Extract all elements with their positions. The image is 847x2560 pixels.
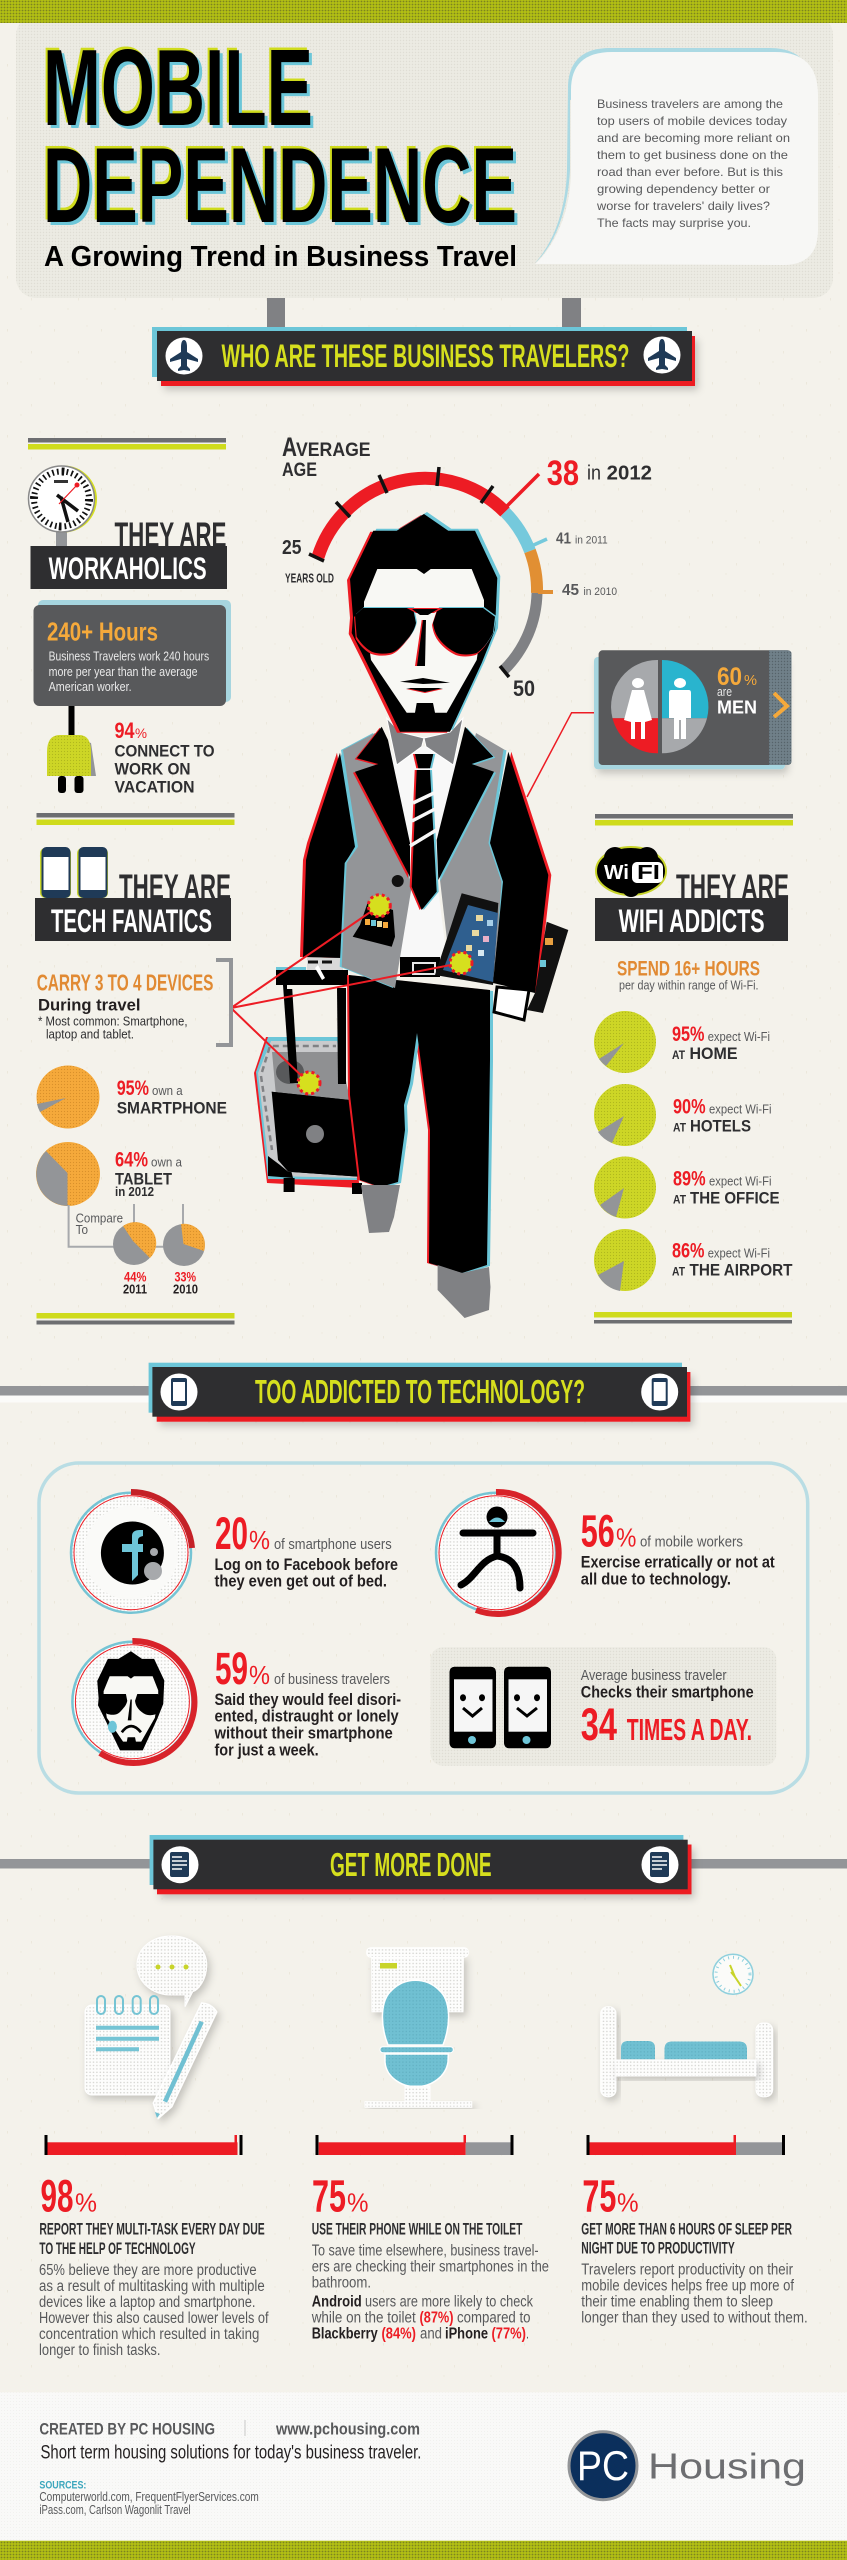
stat: facebook 20 percent: %	[249, 1525, 270, 1555]
heading: workaholics: WORKAHOLICS	[49, 550, 207, 586]
stat: wifi at the office: THE OFFICE	[690, 1188, 780, 1207]
sources: Computerworld.com, FrequentFlyerServices.com	[39, 2490, 259, 2504]
stat: smartphone: own a	[152, 1083, 183, 1098]
heading: average age	[282, 432, 371, 481]
callout: gender split	[527, 650, 792, 797]
stat: wifi at home	[594, 1011, 770, 1073]
section banner: who are these business travelers	[152, 298, 695, 386]
icon: wifi badge	[596, 847, 666, 897]
bar chart: 98 percent	[44, 2135, 242, 2155]
column: multi-task 98 percent: devices like a laptop and smartphone.	[39, 2294, 256, 2311]
stat: 94 percent	[114, 718, 214, 796]
intro speech bubble: The facts may surprise you.	[597, 216, 751, 230]
section banner: too addicted to technology	[0, 1363, 847, 1422]
heading: tech fanatics: TECH FANATICS	[51, 903, 212, 939]
section banner: get more done	[0, 1835, 847, 1894]
stat: disoriented 59 percent: for just a week.	[214, 1741, 319, 1760]
panel: addiction stats	[39, 1463, 808, 1793]
callout: 240+ hours: more per year than the average	[49, 664, 198, 679]
column: multi-task 98 percent: However this also caused lower levels of	[39, 2310, 269, 2327]
stat: facebook 20 percent: Log on to Facebook before	[214, 1555, 398, 1574]
compare connector: Compare	[76, 1211, 123, 1226]
chart: average age gauge: 2012	[607, 462, 652, 484]
chart: average age gauge: in	[587, 462, 601, 484]
column: sleep 75 percent: 75	[582, 2171, 616, 2222]
intro speech bubble	[535, 48, 818, 265]
pie: 2010: 2010	[173, 1281, 198, 1296]
title: DEPENDENCE	[41, 122, 520, 248]
illustration: suitcase	[254, 967, 362, 1194]
stat: wifi at the airport: 86%	[672, 1240, 705, 1263]
column: sleep 75 percent	[581, 2135, 808, 2326]
column: sleep 75 percent: NIGHT DUE TO PRODUCTIVITY	[581, 2238, 735, 2257]
callout: checks smartphone 34 times: Average business traveler	[581, 1667, 727, 1684]
callout: gender split: are	[717, 684, 732, 699]
intro speech bubble: growing dependency better or	[597, 182, 770, 196]
icon: bed and wall clock	[601, 1954, 773, 2097]
stat: wifi at the airport: THE AIRPORT	[690, 1261, 793, 1280]
callout: gender split: MEN	[717, 697, 757, 717]
heading: wifi addicts: WIFI ADDICTS	[619, 903, 765, 939]
title: MOBILE: MOBILE	[46, 30, 316, 152]
intro speech bubble: top users of mobile devices today	[597, 114, 787, 128]
heading: average age: A	[282, 432, 297, 462]
icon: document left	[162, 1846, 198, 1883]
panel: wifi addicts	[594, 814, 793, 1324]
heading: workaholics	[30, 546, 227, 589]
compare connector: To	[76, 1222, 88, 1237]
pie: 2011	[113, 1222, 156, 1296]
chart: average age gauge: 25	[282, 537, 302, 559]
stat: facebook 20 percent: of smartphone users	[274, 1536, 392, 1553]
compare connector	[69, 1204, 183, 1247]
column: toilet 75 percent: %	[347, 2188, 368, 2218]
callout: gender split: %	[744, 672, 757, 689]
stat: disoriented 59 percent: ented, distraught or lonely	[214, 1707, 399, 1726]
column: multi-task 98 percent: REPORT THEY MULTI-TASK EVERY DAY DUE	[39, 2219, 265, 2238]
icon: wifi badge: Wi	[604, 862, 629, 884]
stat: 94 percent: WORK ON	[114, 759, 190, 778]
stat: 94 percent: %	[135, 725, 147, 741]
stat: wifi at the office	[594, 1156, 780, 1218]
stat: wifi at hotels	[594, 1084, 772, 1146]
stat: wifi at the airport: AT	[672, 1265, 686, 1279]
callout: 240+ hours	[34, 600, 231, 706]
stat: exercise 56 percent: Exercise erratically or not at	[581, 1552, 775, 1571]
stat: disoriented 59 percent: 59	[215, 1643, 248, 1694]
chart: average age gauge: 45	[562, 582, 579, 599]
column: toilet 75 percent: (87%)	[420, 2310, 454, 2327]
title: MOBILE: MOBILE	[41, 24, 311, 146]
stat: wifi at the airport	[594, 1229, 793, 1291]
column: sleep 75 percent: longer than they used to without them.	[581, 2309, 808, 2326]
column: toilet 75 percent	[311, 2135, 549, 2343]
column: toilet 75 percent: while on the toilet	[311, 2310, 416, 2327]
icon: wifi badge: FI	[637, 862, 660, 884]
illustration: jacket and shirt	[300, 718, 551, 993]
text: spend hours: per day within range of Wi-Fi.	[619, 977, 758, 992]
intro speech bubble: road than ever before. But is this	[597, 165, 783, 179]
column: multi-task 98 percent: longer to finish tasks.	[39, 2342, 160, 2359]
stat: smartphone: SMARTPHONE	[117, 1098, 227, 1117]
stat: smartphone: 95%	[117, 1077, 149, 1100]
title: DEPENDENCE: DEPENDENCE	[46, 128, 520, 248]
pie: 2011: 44%	[124, 1269, 147, 1285]
callout: 240+ hours: American worker.	[49, 679, 132, 694]
top green band	[0, 0, 847, 23]
column: multi-task 98 percent: %	[75, 2188, 97, 2218]
intro speech bubble: worse for travelers' daily lives?	[596, 199, 770, 213]
icon: notepad, speech bubble and pencil	[85, 1936, 217, 2118]
stat: wifi at the airport: expect Wi-Fi	[708, 1246, 770, 1261]
text: spend hours	[617, 957, 760, 992]
heading: average age: AGE	[282, 460, 317, 481]
callout: checks smartphone 34 times: TIMES A DAY.	[627, 1712, 752, 1747]
panel: wifi addicts: THEY ARE	[676, 868, 789, 907]
column: toilet 75 percent: bathroom.	[312, 2275, 371, 2292]
column: toilet 75 percent: and	[420, 2326, 442, 2343]
pie: 2010: 33%	[174, 1269, 196, 1285]
stat: facebook 20 percent	[71, 1492, 398, 1613]
stat: wifi at hotels: expect Wi-Fi	[709, 1101, 772, 1116]
icon: document right	[642, 1846, 678, 1883]
stat: wifi at hotels: AT	[673, 1121, 687, 1135]
column: multi-task 98 percent: TO THE HELP OF TECHNOLOGY	[39, 2239, 196, 2258]
column: toilet 75 percent: (84%)	[382, 2326, 416, 2343]
heading: tech fanatics	[35, 898, 231, 941]
logo: PC Housing: PC	[577, 2442, 629, 2489]
icon: phone right	[641, 1374, 678, 1410]
column: sleep 75 percent: their time enabling them to sleep	[581, 2293, 773, 2310]
pie: tablet	[36, 1142, 100, 1206]
title: DEPENDENCE: DEPENDENCE	[43, 125, 517, 245]
chart: average age gauge: YEARS OLD	[285, 570, 334, 585]
column: toilet 75 percent: ers are checking their smartphones in the	[312, 2259, 549, 2276]
column: toilet 75 percent: compared to	[457, 2310, 530, 2327]
pie: 2011: 2011	[123, 1281, 147, 1296]
illustration: head with sunglasses	[347, 512, 500, 733]
column: toilet 75 percent: Blackberry	[312, 2326, 378, 2343]
heading: wifi addicts	[595, 898, 788, 941]
title: MOBILE	[41, 24, 316, 152]
chart: average age gauge	[282, 432, 652, 701]
text: carry devices: During travel	[38, 996, 140, 1015]
column: toilet 75 percent: 75	[312, 2171, 346, 2222]
illustration: shoes	[361, 1185, 490, 1318]
column: multi-task 98 percent: concentration which resulted in taking	[39, 2326, 259, 2343]
icon: facebook ring	[71, 1492, 192, 1613]
chart: average age gauge: 41	[556, 530, 571, 547]
stat: 94 percent: CONNECT TO	[114, 742, 214, 761]
column: multi-task 98 percent: 65% believe they are more productive	[39, 2262, 257, 2279]
text: carry devices	[37, 970, 213, 1042]
stat: wifi at home: HOME	[690, 1044, 738, 1063]
icon: crying face ring	[72, 1641, 194, 1763]
footer: Short term housing solutions for today's business traveler.	[40, 2442, 421, 2463]
stat: tablet: TABLET	[115, 1169, 173, 1188]
column: toilet 75 percent: USE THEIR PHONE WHILE ON THE TOILET	[312, 2219, 523, 2238]
pie: men vs women	[611, 660, 708, 753]
bar chart: 75 percent toilet	[316, 2135, 514, 2155]
stat: exercise 56 percent	[436, 1492, 775, 1614]
connector lines to devices	[231, 895, 472, 1094]
chart: average age gauge: in 2010	[584, 586, 617, 598]
intro speech bubble: them to get business done on the	[597, 148, 788, 162]
column: toilet 75 percent: Android	[312, 2294, 362, 2311]
icon: plane left	[166, 338, 202, 374]
stat: tablet: in 2012	[115, 1184, 154, 1199]
callout: gender split: 60	[717, 663, 742, 691]
icon: plane right	[644, 336, 680, 374]
column: toilet 75 percent: (77%)	[492, 2326, 526, 2343]
stat: disoriented 59 percent: without their smartphone	[214, 1724, 393, 1743]
header panel	[0, 0, 847, 298]
pie: smartphone	[36, 1066, 100, 1128]
illustration: tablets	[435, 893, 568, 1020]
stat: wifi at home: 95%	[672, 1023, 705, 1046]
footer	[0, 2392, 847, 2541]
stat: disoriented 59 percent: Said they would feel disori-	[214, 1690, 401, 1709]
stat: wifi at the office: expect Wi-Fi	[709, 1174, 772, 1189]
bar chart: 75 percent sleep	[586, 2135, 785, 2155]
column: multi-task 98 percent	[39, 2135, 269, 2359]
stat: tablet	[115, 1149, 183, 1199]
stat: wifi at home: expect Wi-Fi	[708, 1029, 770, 1044]
intro speech bubble: and are becoming more reliant on	[597, 131, 790, 145]
panel: tech fanatics	[35, 813, 234, 1324]
illustration: trousers	[347, 975, 493, 1274]
callout: checks smartphone 34 times	[431, 1647, 776, 1766]
logo: PC Housing: Housing	[648, 2445, 806, 2486]
icon: phone left	[160, 1374, 198, 1410]
icon: two phones	[40, 847, 108, 898]
stat: exercise 56 percent: %	[616, 1523, 636, 1553]
chart: average age gauge: in 2011	[575, 534, 608, 546]
pie: 2010	[163, 1224, 205, 1296]
sources: iPass.com, Carlson Wagonlit Travel	[39, 2503, 191, 2517]
column: toilet 75 percent: iPhone	[445, 2326, 488, 2343]
icon: power plug	[47, 706, 96, 793]
column: sleep 75 percent: %	[617, 2188, 639, 2218]
footer: www.pchousing.com	[275, 2419, 420, 2438]
stat: wifi at the office: 89%	[673, 1168, 706, 1191]
stat: exercise 56 percent: all due to technology.	[581, 1569, 731, 1588]
subtitle: A Growing Trend in Business Travel	[44, 241, 517, 273]
stat: 94 percent: VACATION	[114, 777, 194, 796]
panel: tech fanatics: THEY ARE	[119, 868, 231, 907]
stat: wifi at the office: AT	[673, 1192, 687, 1206]
chart: average age gauge: 50	[513, 676, 535, 701]
title: DEPENDENCE: DEPENDENCE	[41, 122, 515, 242]
logo: PC Housing	[569, 2432, 806, 2500]
stat: facebook 20 percent: they even get out of bed.	[214, 1572, 387, 1591]
sources	[39, 2479, 259, 2517]
section banner: get more done: GET MORE DONE	[330, 1846, 492, 1883]
icon: smiling phones	[450, 1667, 551, 1748]
stat: disoriented 59 percent: %	[249, 1660, 270, 1690]
stat: disoriented 59 percent: of business travelers	[274, 1671, 390, 1688]
column: toilet 75 percent: .	[526, 2326, 529, 2343]
chart: average age gauge: 38	[547, 454, 579, 493]
column: sleep 75 percent: mobile devices helps free up more of	[581, 2277, 795, 2294]
callout: checks smartphone 34 times: 34	[581, 1699, 617, 1750]
column: toilet 75 percent: users are more likely to check	[365, 2294, 533, 2311]
footer: CREATED BY PC HOUSING	[39, 2419, 215, 2438]
illustration: traveler character	[231, 512, 568, 1318]
stat: tablet: 64%	[115, 1149, 148, 1172]
panel: workaholics	[28, 438, 231, 796]
stat: exercise 56 percent: 56	[581, 1506, 615, 1557]
icon: exercise ring	[436, 1492, 559, 1614]
stat: wifi at home: AT	[672, 1048, 686, 1062]
icon: station clock	[28, 466, 97, 548]
title: MOBILE: MOBILE	[43, 27, 313, 149]
column: toilet 75 percent: To save time elsewhere, business travel-	[312, 2243, 539, 2260]
section banner: too addicted to technology: TOO ADDICTED TO TECHNOLOGY?	[255, 1373, 585, 1410]
stat: facebook 20 percent: 20	[215, 1508, 248, 1559]
icon: toilet	[365, 1948, 472, 2107]
heading: average age: VERAGE	[296, 440, 371, 461]
callout: checks smartphone 34 times: Checks their smartphone	[581, 1683, 754, 1702]
intro speech bubble: Business travelers are among the	[597, 97, 783, 111]
illustration: phone in pocket	[353, 902, 395, 947]
bracket	[216, 960, 231, 1045]
stat: wifi at hotels: 90%	[673, 1095, 706, 1118]
bottom green band	[0, 2541, 847, 2560]
text: carry devices: CARRY 3 TO 4 DEVICES	[37, 970, 213, 996]
stat: tablet: own a	[151, 1155, 183, 1170]
stat: wifi at hotels: HOTELS	[690, 1117, 751, 1136]
heading: they are: THEY ARE	[114, 516, 226, 555]
callout: 240+ hours: Business Travelers work 240 hours	[49, 649, 209, 664]
stat: 94 percent: 94	[114, 718, 135, 743]
stat: smartphone	[117, 1077, 227, 1117]
sources: SOURCES:	[39, 2479, 86, 2491]
column: multi-task 98 percent: as a result of multitasking with multiple	[39, 2278, 265, 2295]
text: spend hours: SPEND 16+ HOURS	[617, 957, 760, 980]
text: carry devices: laptop and tablet.	[46, 1028, 134, 1042]
column: multi-task 98 percent: 98	[40, 2171, 74, 2222]
text: carry devices: * Most common: Smartphone,	[38, 1014, 188, 1028]
arrow: chevron	[774, 693, 787, 717]
column: sleep 75 percent: Travelers report productivity on their	[581, 2261, 793, 2278]
callout: 240+ hours: 240+ Hours	[47, 617, 158, 647]
stat: disoriented 59 percent	[72, 1641, 401, 1763]
stat: exercise 56 percent: of mobile workers	[640, 1534, 743, 1551]
